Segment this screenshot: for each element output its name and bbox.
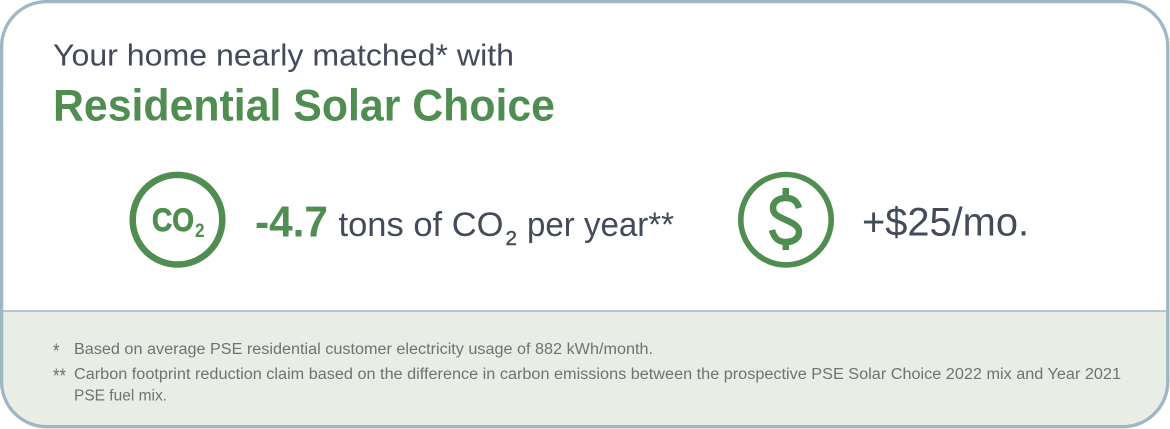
footnote: usage: *	[53, 340, 60, 362]
footnote: carbon claim: PSE fuel mix.	[74, 388, 167, 405]
footnote: usage: Based on average PSE residential customer electricity usage of 882 kWh/month.	[74, 341, 653, 358]
stat: CO2 reduction: -4.7	[255, 199, 328, 247]
intro text: Your home nearly matched* with	[53, 38, 514, 72]
heading: Residential Solar Choice	[53, 82, 555, 131]
footnote: carbon claim: **	[53, 366, 66, 388]
stat: CO2 reduction: per year**	[527, 206, 674, 244]
icon: CO2 circle	[133, 175, 222, 264]
icon: CO2 circle: 2	[195, 221, 204, 242]
stat: CO2 reduction: 2	[506, 228, 517, 250]
icon: dollar circle	[741, 174, 831, 265]
footnote: carbon claim: Carbon footprint reduction claim based on the difference in carbon emissions between the prospective PSE Solar Choice 2022 mix and Year 2021	[74, 366, 1121, 383]
icon: CO2 circle: CO	[152, 202, 194, 238]
panel: footnotes background	[2, 311, 1168, 427]
stat: monthly cost: +$25/mo.	[862, 200, 1029, 244]
stat: CO2 reduction: tons of CO	[338, 206, 504, 244]
footnote: carbon claim	[53, 366, 1121, 405]
stat: CO2 reduction	[255, 199, 674, 250]
